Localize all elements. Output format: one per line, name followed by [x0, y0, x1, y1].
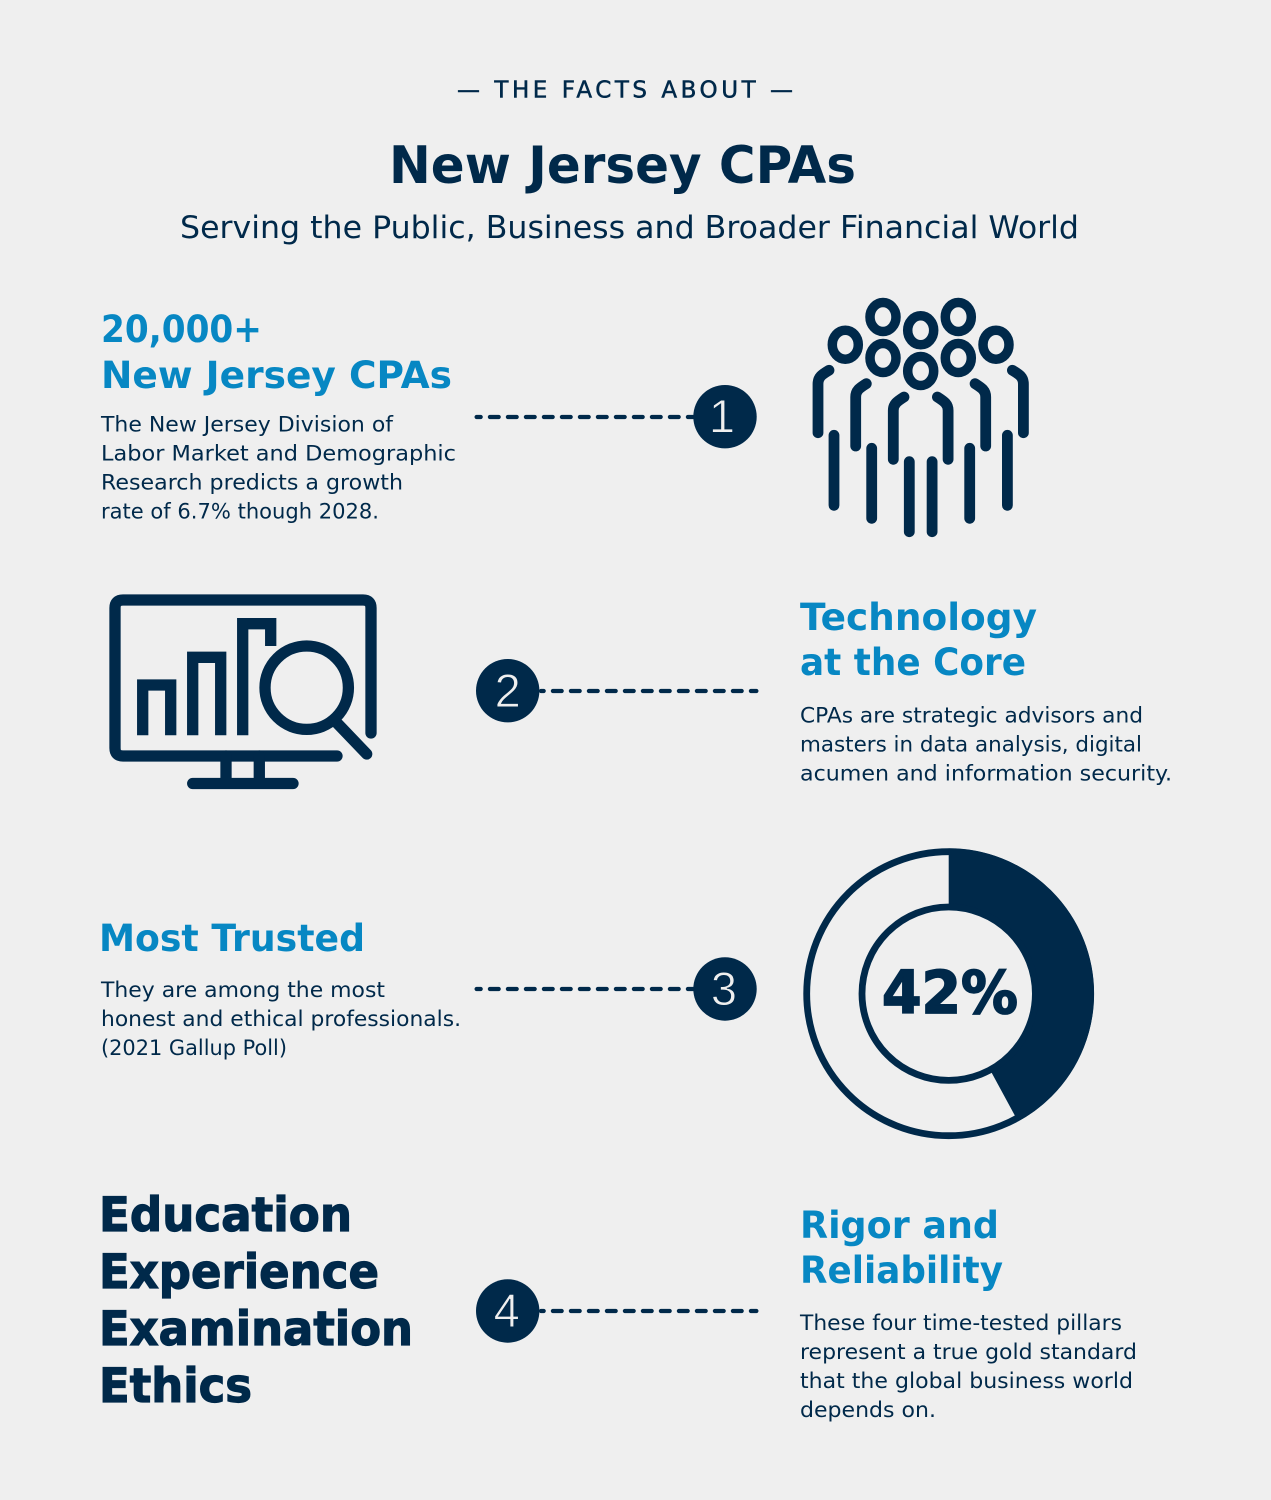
heading: Technology at the Core: at the Core [800, 641, 1026, 684]
heading: 20,000+ New Jersey CPAs [101, 308, 452, 397]
heading: Rigor and Reliability: Reliability [800, 1249, 1003, 1292]
number badge 1: 1 [709, 390, 735, 443]
heading: Rigor and Reliability: Rigor and [800, 1204, 999, 1247]
text block: Gallup poll [100, 978, 461, 1061]
text block: four pillars: Education [99, 1188, 352, 1243]
filled 42% wedge [949, 848, 1094, 1121]
text block: Gallup poll: (2021 Gallup Poll) [101, 1036, 287, 1061]
text block: four pillars: Experience [99, 1245, 379, 1300]
title: New Jersey CPAs [389, 136, 856, 196]
number badge 3: 3 [711, 962, 737, 1015]
number badge 1 [693, 385, 757, 448]
chart: 42% donut [807, 848, 1094, 1136]
text block: growth rate: Research predicts a growth [101, 470, 403, 496]
text block: growth rate: rate of 6.7% though 2028. [101, 500, 379, 524]
text block: strategic advisors: acumen and information security. [800, 762, 1172, 786]
heads [832, 302, 1009, 386]
text block: gold standard: These four time-tested pillars [799, 1311, 1122, 1336]
arms and legs [818, 370, 1023, 532]
text block: gold standard [799, 1311, 1137, 1423]
heading: Most Trusted: Most Trusted [99, 917, 365, 960]
subtitle: Serving the Public, Business and Broader Financial World [180, 210, 1079, 246]
eyebrow: — THE FACTS ABOUT — [457, 78, 793, 104]
text block: four pillars [99, 1188, 413, 1414]
heading: Rigor and Reliability [800, 1204, 1003, 1292]
text block: strategic advisors: masters in data analysis, digital [800, 732, 1142, 758]
bars [143, 624, 271, 735]
text block: four pillars: Ethics [99, 1359, 252, 1414]
text block: gold standard: that the global business world [800, 1369, 1133, 1394]
text block: Gallup poll: honest and ethical professionals. [101, 1007, 461, 1032]
heading: 20,000+ New Jersey CPAs: New Jersey CPAs [101, 354, 452, 397]
heading: Technology at the Core [800, 596, 1037, 684]
text block: gold standard: represent a true gold standard [800, 1340, 1137, 1365]
number badge 3 [693, 957, 757, 1021]
text block: growth rate [100, 412, 456, 524]
text block: gold standard: depends on. [800, 1398, 936, 1423]
text block: growth rate: The New Jersey Division of [100, 412, 393, 438]
connector: step 1 [477, 385, 757, 448]
outer ring [807, 852, 1091, 1136]
heading: Technology at the Core: Technology [800, 596, 1037, 639]
heading: 20,000+ New Jersey CPAs: 20,000+ [101, 308, 262, 351]
panel: fact 4 text [799, 1204, 1137, 1423]
monitor stand [193, 756, 293, 784]
text block: growth rate: Labor Market and Demographic [101, 442, 456, 466]
connector: step 4 [476, 1279, 756, 1343]
text block: four pillars: Examination [99, 1302, 413, 1357]
connector: step 2 [476, 659, 756, 722]
text block: Gallup poll: They are among the most [100, 978, 385, 1003]
icon: group of people [818, 302, 1023, 532]
text block: strategic advisors [800, 704, 1172, 786]
panel: fact 1 text [100, 308, 456, 524]
connector: step 3 [477, 957, 757, 1021]
number badge 4 [476, 1279, 539, 1343]
text block: strategic advisors: CPAs are strategic advisors and [800, 704, 1143, 728]
inner ring [862, 907, 1035, 1080]
number badge 2: 2 [495, 664, 521, 717]
monitor frame [115, 600, 371, 756]
number badge 2 [476, 659, 539, 722]
header [180, 78, 1079, 246]
value: 42% [882, 958, 1018, 1027]
panel: fact 3 text [99, 917, 461, 1061]
icon: monitor with bar chart and magnifier [115, 600, 371, 784]
panel: fact 2 text [800, 596, 1172, 786]
magnifier [337, 723, 367, 754]
number badge 4: 4 [494, 1284, 520, 1337]
